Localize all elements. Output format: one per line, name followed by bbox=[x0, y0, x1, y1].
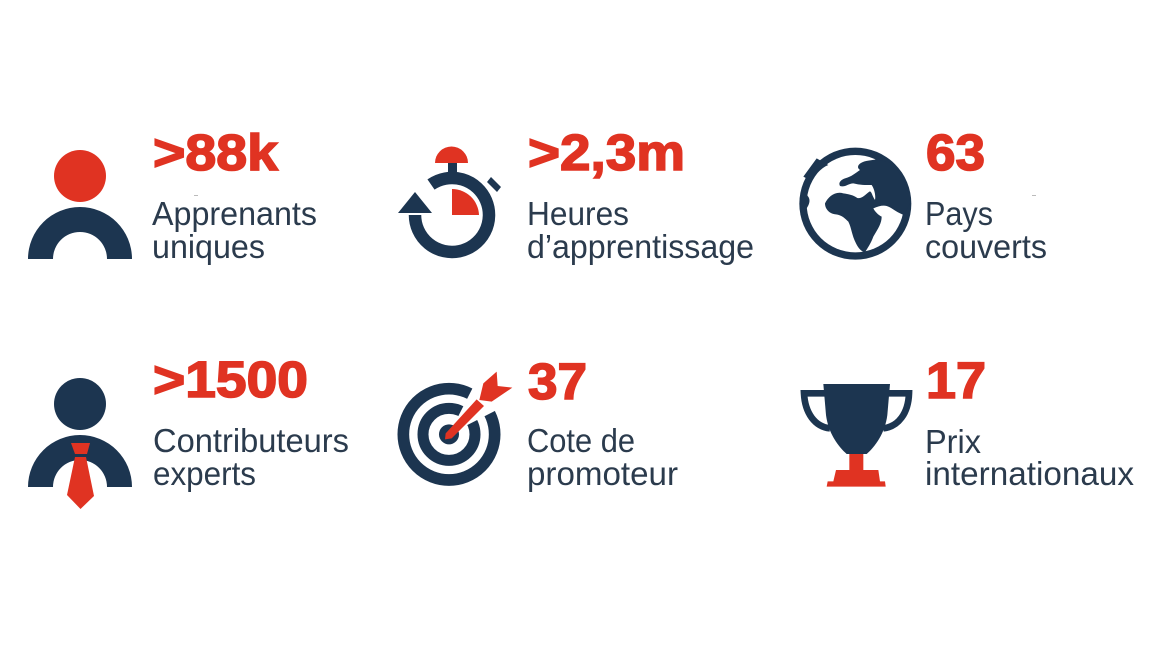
stat: cote de promoteur bbox=[403, 353, 678, 492]
label: heures d'apprentissage: Heures bbox=[527, 195, 629, 232]
icon: learner bbox=[28, 150, 132, 259]
label: prix internationaux: internationaux bbox=[925, 455, 1134, 492]
icon: trophy bbox=[804, 384, 909, 487]
icon: stopwatch bbox=[398, 146, 501, 252]
number: >1500: >1500 bbox=[153, 351, 308, 408]
stat: pays couverts bbox=[799, 124, 1047, 265]
label: pays couverts: Pays bbox=[925, 195, 993, 232]
number: 17: 17 bbox=[926, 352, 986, 409]
number: >2,3m: >2,3m bbox=[528, 124, 685, 181]
number: 37: 37 bbox=[528, 353, 587, 410]
icon: expert with tie bbox=[28, 378, 132, 509]
icon: target with arrow bbox=[403, 372, 512, 480]
label: contributeurs experts: experts bbox=[153, 455, 256, 492]
number: >88k: >88k bbox=[153, 124, 279, 181]
label: contributeurs experts: Contributeurs bbox=[153, 422, 349, 459]
label: prix internationaux: Prix bbox=[925, 423, 981, 460]
label: cote de promoteur: Cote de bbox=[527, 422, 635, 459]
stat: heures d'apprentissage bbox=[398, 124, 754, 265]
label: apprenants uniques: uniques bbox=[152, 228, 265, 265]
label: cote de promoteur: promoteur bbox=[527, 455, 678, 492]
label: apprenants uniques: Apprenants bbox=[152, 195, 317, 232]
icon: globe bbox=[799, 148, 911, 260]
stat: apprenants uniques bbox=[28, 124, 317, 265]
label: heures d'apprentissage: d’apprentissage bbox=[527, 228, 754, 265]
number: 63: 63 bbox=[926, 124, 985, 181]
label: pays couverts: couverts bbox=[925, 228, 1047, 265]
stat: prix internationaux bbox=[804, 352, 1134, 492]
stat: contributeurs experts bbox=[28, 351, 349, 509]
